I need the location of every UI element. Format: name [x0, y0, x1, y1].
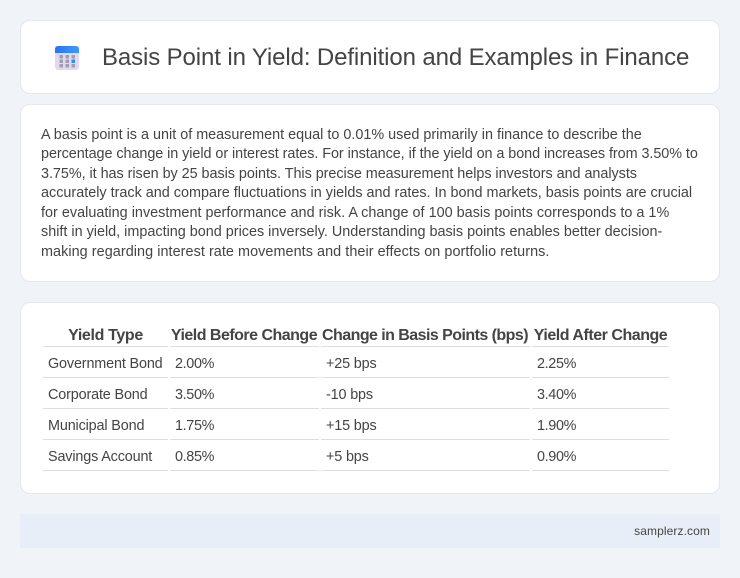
icon: calendar: [55, 46, 79, 70]
panel: table card: [20, 302, 720, 494]
row: government bond: 2.25%: [537, 356, 576, 372]
row: government bond: [48, 356, 576, 372]
text block: definition paragraph: shift in yield, impacting bond prices inversely. Understanding basis points enables better decision-: [41, 224, 662, 240]
row: corporate bond: Corporate Bond: [48, 387, 148, 403]
row: savings account: Savings Account: [48, 449, 152, 465]
row: government bond: +25 bps: [326, 356, 377, 372]
table header: Yield After Change: [534, 327, 667, 344]
row: corporate bond: [48, 387, 576, 403]
row: government bond: Government Bond: [48, 356, 163, 372]
text block: definition paragraph: A basis point is a unit of measurement equal to 0.01% used primarily in finance to describe the: [41, 127, 642, 143]
table header: Change in Basis Points (bps): [322, 327, 528, 344]
text block: definition paragraph: making regarding interest rate movements and their effects on portfolio returns.: [41, 244, 549, 260]
row: municipal bond: [48, 418, 576, 434]
row: savings account: 0.90%: [537, 449, 576, 465]
panel: header: [20, 20, 720, 94]
text block: definition paragraph: accurately track and compare fluctuations in yields and rates. In bond markets, basis points are crucial: [41, 185, 692, 201]
table header: Yield Before Change: [171, 327, 317, 344]
row: savings account: [48, 449, 576, 465]
row: municipal bond: Municipal Bond: [48, 418, 144, 434]
table header: Yield Type: [68, 327, 143, 344]
row: corporate bond: 3.50%: [175, 387, 214, 403]
text block: definition paragraph: [41, 127, 698, 260]
panel: description: [20, 104, 720, 282]
footer bar: [20, 514, 720, 548]
text block: definition paragraph: 3.75%, it has risen by 25 basis points. This precise measurement helps investors and analysts: [41, 166, 637, 182]
row: savings account: +5 bps: [326, 449, 369, 465]
title: Basis Point in Yield: Definition and Examples in Finance: [102, 44, 689, 71]
row: savings account: 0.85%: [175, 449, 214, 465]
row: municipal bond: 1.75%: [175, 418, 214, 434]
row: corporate bond: 3.40%: [537, 387, 576, 403]
row: municipal bond: 1.90%: [537, 418, 576, 434]
row: government bond: 2.00%: [175, 356, 214, 372]
text block: definition paragraph: for evaluating investment performance and risk. A change of 100 basis points corresponds to a 1%: [41, 205, 669, 221]
text block: definition paragraph: percentage change in yield or interest rates. For instance, if the yield on a bond increases from 3.50% to: [41, 146, 698, 162]
row: municipal bond: +15 bps: [326, 418, 377, 434]
row: corporate bond: -10 bps: [326, 387, 373, 403]
footer text: samplerz.com: [634, 524, 710, 538]
table header: [68, 327, 668, 344]
